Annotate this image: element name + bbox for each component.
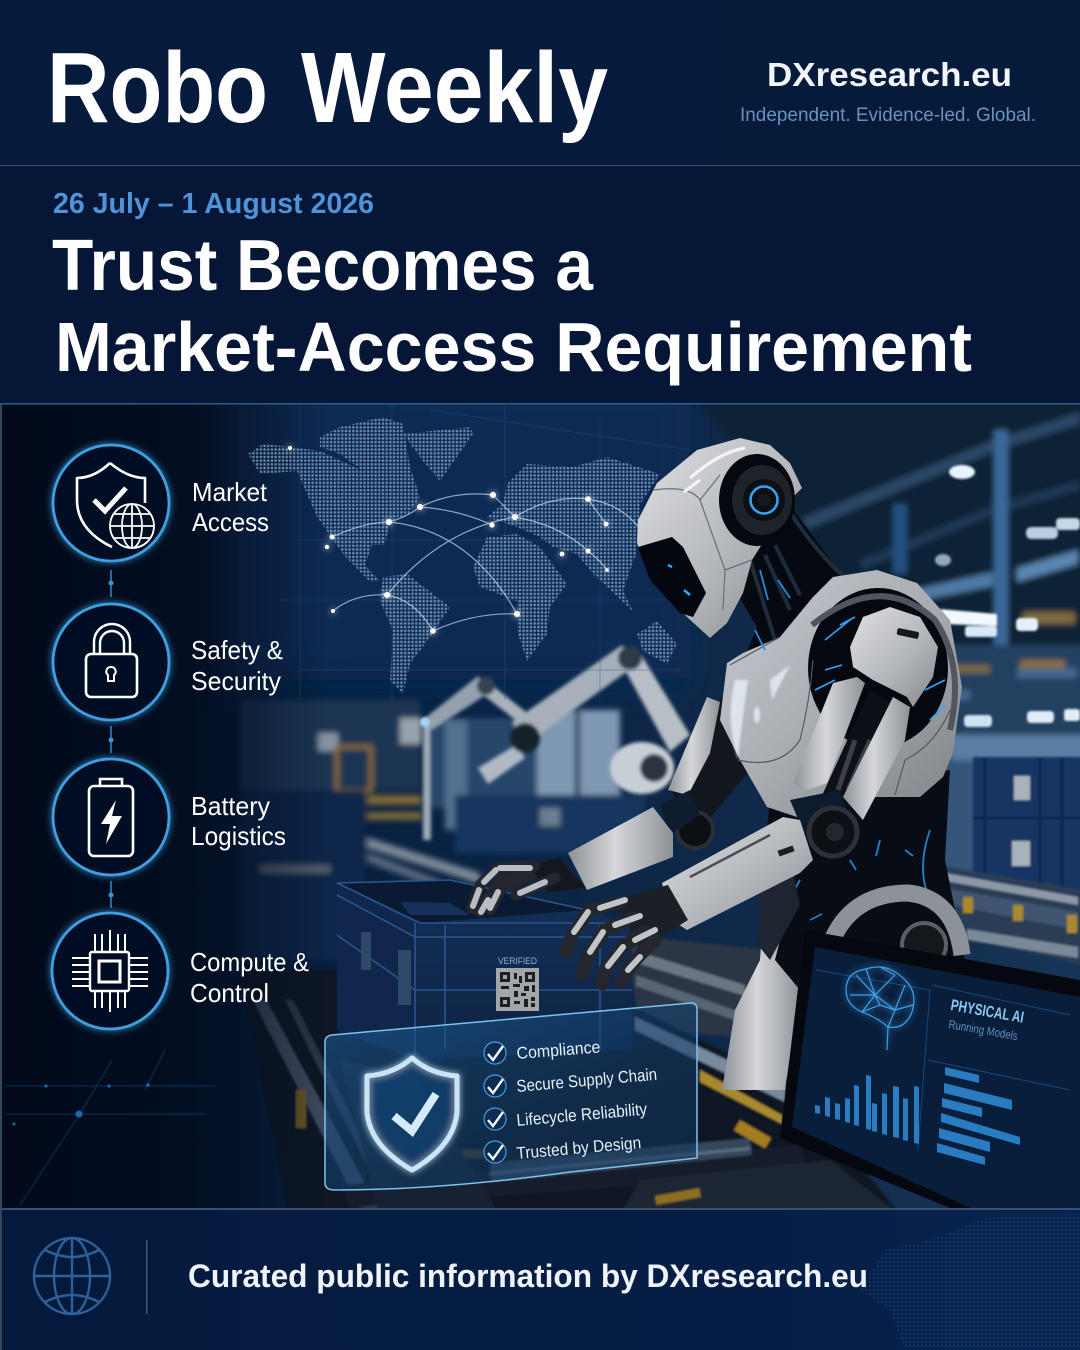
label: Safety & Security xyxy=(191,635,283,696)
label: Compute & Control xyxy=(190,947,309,1008)
left darkening xyxy=(0,404,330,1208)
brand name: DXresearch.eu xyxy=(767,56,1012,93)
title word: Robo: Robo xyxy=(47,32,268,144)
far upper arm xyxy=(670,660,750,830)
icon: compute chip xyxy=(52,913,168,1029)
foreground conveyor xyxy=(240,970,900,1215)
visor xyxy=(638,537,706,617)
title word: Weekly: Weekly xyxy=(301,32,608,144)
label: Battery Logistics xyxy=(191,791,286,851)
map backdrop panel xyxy=(220,380,690,710)
screen title: PHYSICAL AI xyxy=(949,997,1025,1027)
label: Battery Logistics: Logistics xyxy=(191,821,286,851)
checklist items: Lifecycle Reliability xyxy=(516,1100,648,1130)
headline band xyxy=(0,165,1080,404)
far forearm xyxy=(568,807,673,890)
world map hologram xyxy=(248,404,690,700)
warehouse shelving and lights xyxy=(680,380,1080,880)
robot xyxy=(472,438,965,1090)
map grid lines xyxy=(280,404,690,700)
headline line 2: Market-Access Requirement xyxy=(55,308,972,386)
headline line 1: Trust Becomes a xyxy=(52,226,594,306)
footer map dots xyxy=(860,1214,1080,1350)
label: Market Access xyxy=(192,477,269,537)
continents xyxy=(248,417,677,694)
near elbow xyxy=(790,790,850,835)
head highlights xyxy=(684,448,745,492)
neck xyxy=(735,505,843,663)
checklist items: Compliance xyxy=(516,1037,601,1063)
head xyxy=(637,438,802,638)
near forearm xyxy=(662,817,813,930)
trust shield xyxy=(367,1058,457,1170)
checklist items: Secure Supply Chain xyxy=(516,1065,658,1096)
connectors xyxy=(108,570,114,908)
monitor xyxy=(780,930,1080,1208)
far elbow xyxy=(677,812,713,848)
upper arm near xyxy=(820,690,905,810)
brain network xyxy=(846,967,914,1050)
footer text: Curated public information by DXresearch.eu xyxy=(188,1258,868,1294)
icon column xyxy=(52,445,309,1029)
hip ring xyxy=(830,893,962,967)
label: Compute & Control: Control xyxy=(190,978,269,1008)
body cable glints xyxy=(790,830,930,920)
screen subtitle: Running Models xyxy=(947,1017,1019,1043)
ear joint xyxy=(719,454,795,546)
header band xyxy=(0,0,1080,165)
network nodes xyxy=(288,446,609,634)
neck glints xyxy=(755,570,790,650)
label: Safety & Security: Security xyxy=(191,666,281,696)
shoulder cap xyxy=(850,607,938,707)
label: Safety & Security: Safety & xyxy=(191,635,283,665)
shoulder dark ring xyxy=(808,588,948,748)
icon: globe xyxy=(34,1238,110,1314)
chest highlights xyxy=(731,665,790,760)
neck cables xyxy=(750,515,842,640)
network arcs xyxy=(332,494,650,631)
white thigh xyxy=(722,890,800,1090)
trust shield check xyxy=(394,1094,436,1131)
near hand xyxy=(566,885,688,984)
head seams xyxy=(653,475,752,610)
label: Market Access: Market xyxy=(192,477,268,507)
horizontal bars xyxy=(937,1067,1020,1165)
far hand xyxy=(472,858,585,912)
right stacked crates xyxy=(973,757,1080,890)
brand tagline: Independent. Evidence-led. Global. xyxy=(740,104,1036,126)
date range: 26 July – 1 August 2026 xyxy=(53,188,374,220)
checklist glass panel xyxy=(325,1003,697,1190)
footer xyxy=(0,404,1080,1350)
verified crate xyxy=(337,880,632,1060)
torso xyxy=(720,570,962,817)
background robot arms xyxy=(420,645,690,840)
icon: padlock xyxy=(53,604,169,720)
label: Compute & Control: Compute & xyxy=(190,947,309,977)
hero scene background xyxy=(0,380,1080,1215)
bar chart xyxy=(815,1075,919,1144)
hero scene xyxy=(2,404,1080,1208)
label: Battery Logistics: Battery xyxy=(191,791,270,821)
icon: market access shield and globe xyxy=(53,445,169,561)
QR code xyxy=(496,968,539,1011)
label: VERIFIED: VERIFIED xyxy=(498,956,537,966)
checklist items xyxy=(484,1037,658,1163)
icon: battery xyxy=(53,759,169,875)
mid factory shelves xyxy=(240,700,645,960)
checklist items: Trusted by Design xyxy=(516,1133,642,1163)
lower body cables xyxy=(740,770,965,1090)
floor grid xyxy=(5,1050,215,1205)
label: Market Access: Access xyxy=(192,507,269,537)
right side conveyor xyxy=(625,865,1080,1040)
screen panels xyxy=(816,970,1070,1150)
